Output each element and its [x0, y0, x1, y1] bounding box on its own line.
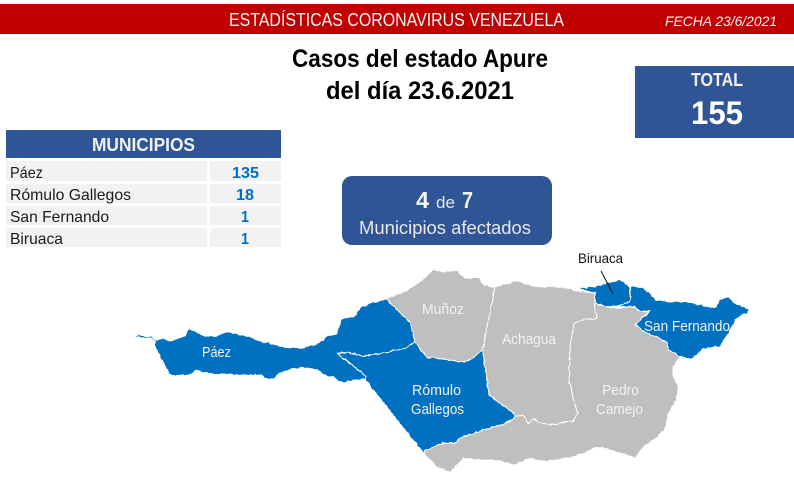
table: municipios: [6, 130, 281, 248]
region: Achagua: [483, 281, 597, 425]
row: Páez: [6, 161, 281, 182]
callout: municipios afectados: Municipios afectados: [359, 218, 531, 238]
map labels: Pedro: [602, 382, 639, 399]
callout: Biruaca label with leader line: Biruaca: [578, 250, 623, 266]
map labels: [202, 301, 730, 418]
map: Apure municipalities: [132, 270, 748, 473]
map labels: Muñoz: [422, 301, 464, 318]
map labels: Rómulo: [412, 382, 461, 399]
row: Biruaca: 1: [241, 231, 249, 248]
row: Rómulo Gallegos: 18: [236, 187, 254, 204]
row: San Fernando: San Fernando: [10, 209, 109, 226]
total box: 155: [691, 95, 743, 131]
title: [292, 45, 548, 105]
row: Páez: Páez: [10, 165, 43, 182]
map labels: Gallegos: [411, 401, 464, 418]
row: San Fernando: 1: [241, 209, 249, 226]
title: Casos del estado Apure: [292, 45, 548, 73]
map labels: Achagua: [502, 331, 557, 348]
row: Páez: 135: [232, 165, 259, 182]
header bar: ESTADÍSTICAS CORONAVIRUS VENEZUELA: [229, 10, 564, 30]
total box: [635, 66, 794, 138]
row: Rómulo Gallegos: [6, 184, 281, 204]
callout: municipios afectados: 4: [416, 187, 429, 213]
map labels: San Fernando: [644, 318, 730, 335]
region: Biruaca: [577, 279, 630, 307]
region: Muñoz: [386, 270, 495, 362]
callout: municipios afectados: de: [436, 193, 455, 212]
row: Biruaca: [6, 228, 281, 248]
header bar: FECHA 23/6/2021: [665, 13, 777, 29]
row: Rómulo Gallegos: Rómulo Gallegos: [10, 187, 131, 204]
header bar: [0, 4, 794, 34]
total box: TOTAL: [691, 70, 743, 90]
table header: MUNICIPIOS: [92, 135, 195, 155]
callout: Biruaca label with leader line: [578, 250, 623, 294]
region: Pedro Camejo: [423, 303, 680, 473]
title: del día 23.6.2021: [326, 77, 514, 105]
region: San Fernando: [617, 287, 748, 359]
map labels: Camejo: [596, 401, 643, 418]
callout: municipios afectados: [342, 176, 552, 245]
map labels: Páez: [202, 344, 231, 361]
table header: [6, 130, 281, 158]
region: Páez: [132, 299, 415, 383]
region: Rómulo Gallegos: [337, 342, 517, 453]
callout: municipios afectados: 7: [462, 187, 473, 213]
row: San Fernando: [6, 206, 281, 226]
row: Biruaca: Biruaca: [10, 231, 63, 248]
